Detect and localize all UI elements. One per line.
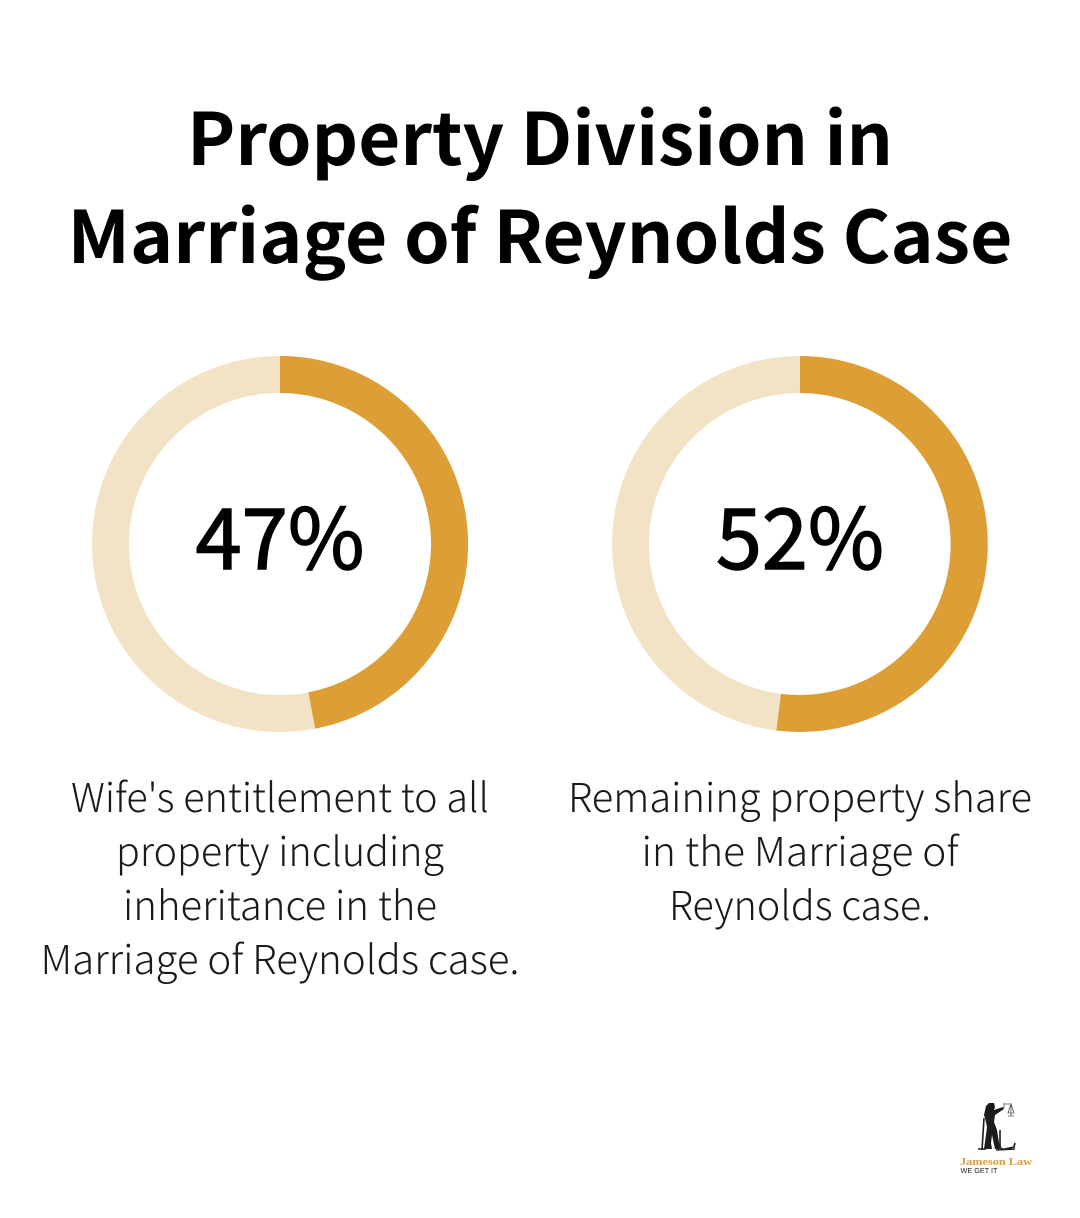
description: remaining share: in the Marriage of [642, 820, 961, 878]
value: 52%: 52% [716, 473, 884, 594]
donut chart: 52% [630, 374, 970, 714]
description: remaining share: Reynolds case. [669, 874, 931, 932]
donut chart: 47% [110, 374, 450, 714]
description: wife's entitlement: Wife's entitlement to all [71, 766, 489, 824]
brand name: Jameson Law [960, 1156, 1032, 1168]
description: wife's entitlement [40, 766, 520, 986]
description: remaining share: Remaining property share [568, 766, 1032, 824]
description: wife's entitlement: property including [116, 820, 444, 878]
title: Marriage of Reynolds Case [68, 179, 1012, 284]
value: 47%: 47% [196, 473, 364, 594]
panel: 47 percent [40, 374, 520, 986]
tagline: WE GET IT [960, 1168, 998, 1175]
title: Property Division in [187, 81, 893, 186]
panel: 52 percent [568, 374, 1032, 932]
description: wife's entitlement: Marriage of Reynolds case. [40, 928, 520, 986]
description: remaining share [568, 766, 1032, 932]
logo: Jameson Law [960, 1103, 1032, 1175]
title [68, 81, 1012, 284]
icon: lady justice [978, 1103, 1015, 1150]
description: wife's entitlement: inheritance in the [123, 874, 437, 932]
